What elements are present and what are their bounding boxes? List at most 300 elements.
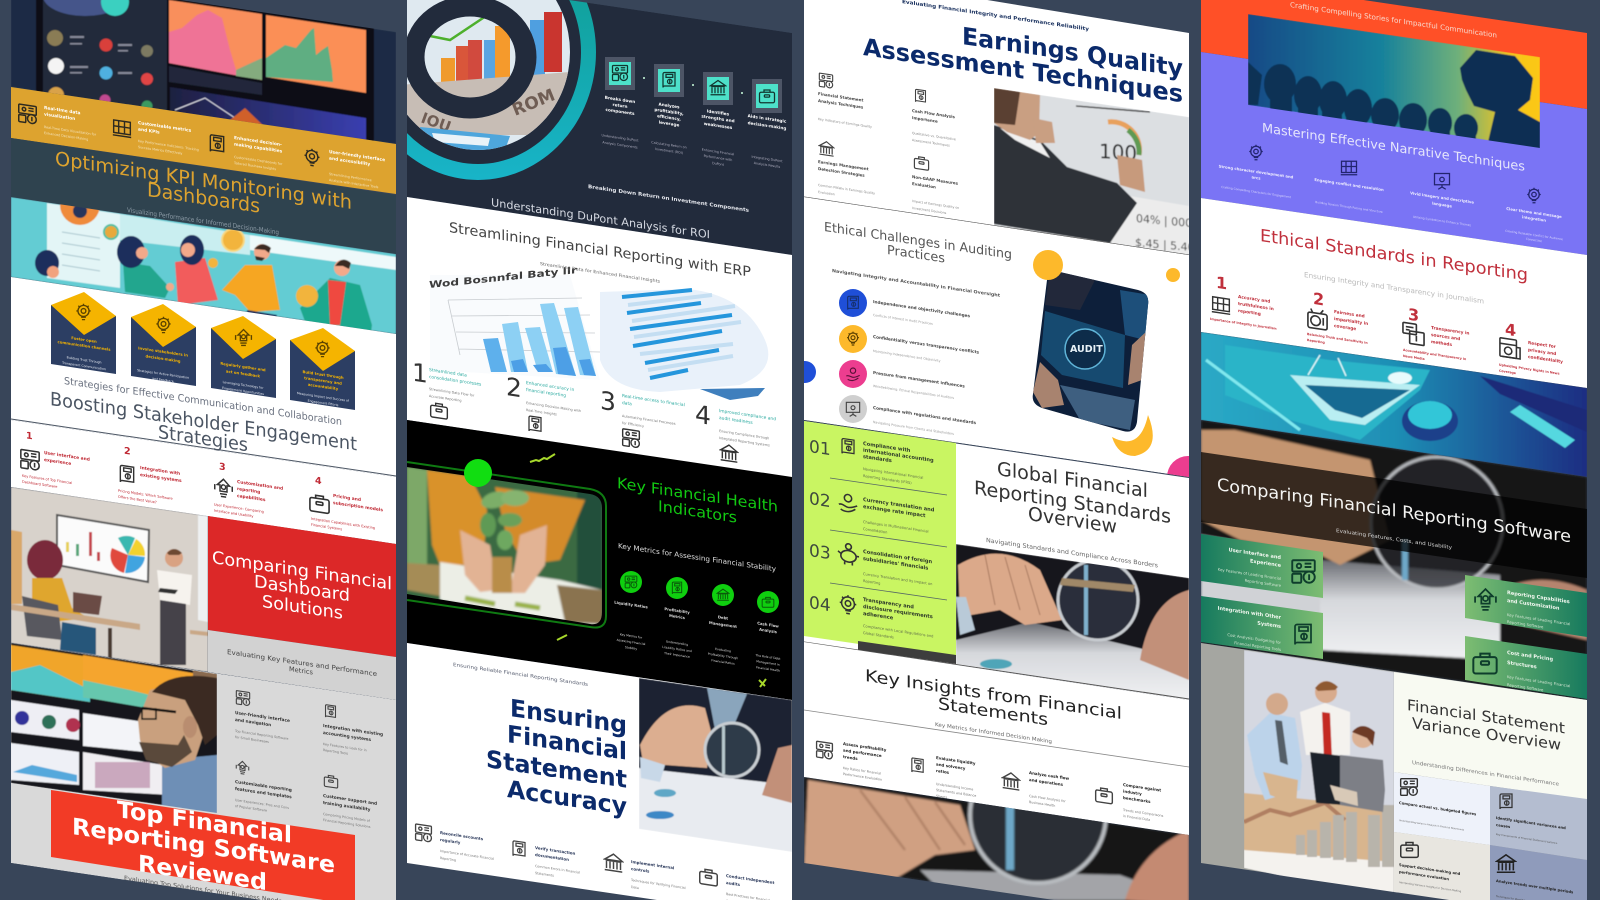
cream title panel: Understanding Differences in Financial Performance (1412, 760, 1559, 788)
photo: magnifying glass on report (639, 678, 792, 852)
panel: KPI dashboard photo (11, 0, 396, 145)
technique 2: Building Tension Through Pacing and Structure (1315, 200, 1383, 214)
standard 2: Fairness and (1334, 309, 1365, 320)
subheading: Ensuring Integrity and Transparency in Journalism (1304, 270, 1484, 306)
technique 1 (818, 73, 872, 129)
item 3: Implement internal (631, 859, 675, 870)
card: build trust: Build trust through (302, 369, 344, 380)
feature: real-time data: Real-time data (44, 105, 80, 116)
feature: real-time data: Real-Time Data Visualization for (44, 125, 97, 137)
insight 3: Business Health (1029, 800, 1055, 808)
insight 3: Cash Flow Analysis for (1029, 794, 1066, 804)
panel: key insights from financial statements (804, 642, 1189, 835)
card: user interface: User Interface and (1229, 547, 1281, 561)
standard 1: reporting (1238, 308, 1261, 317)
subheading: Navigating Integrity and Accountability in Financial Oversight (832, 268, 1000, 299)
standard 2 (1307, 288, 1368, 351)
quadrant 1 (1394, 772, 1490, 845)
standard 01: Reporting Standards (IFRS) (863, 474, 912, 485)
subheading: Strategies for Effective Communication and Collaboration (64, 376, 342, 428)
step 2: Enhanced accuracy in (526, 380, 574, 393)
item 1: Dashboard Software (22, 480, 57, 489)
illustration: team collaborating (11, 197, 396, 334)
feature: enhanced decision-making: Tailored Business Insights (233, 161, 276, 171)
technique 2: Assessment Techniques (912, 138, 950, 148)
chart photo: bars (429, 265, 600, 380)
heading: Statement (486, 745, 627, 794)
challenge 3 (839, 360, 965, 400)
heading line 2: Statements (938, 694, 1048, 729)
bottom mask: slanted page edge (1201, 864, 1600, 900)
technique 1: Financial Statement (818, 91, 863, 103)
technique 4: Impact of Earnings Quality on (912, 199, 959, 210)
step 3: Enhancing Financial (702, 148, 734, 156)
standard 4 (1499, 319, 1563, 382)
feature 2 (323, 704, 383, 755)
card: cost and pricing: Key Features of Leading Financial (1507, 674, 1570, 688)
heading: Ensuring (510, 694, 627, 739)
photo: hands with coins and seedling (405, 460, 605, 630)
feature: customizable metrics: and KPIs (138, 127, 160, 136)
panel: DuPont analysis (407, 0, 792, 255)
technique 3 (818, 140, 875, 202)
item 3 (214, 461, 283, 523)
metric 2: Liquidity Ratios and (662, 645, 692, 653)
technique 3: Vivid imagery and descriptive (1410, 190, 1474, 205)
quadrant 2 (1490, 786, 1587, 860)
feature: real-time data (19, 101, 97, 143)
feature: user-friendly interface: User-friendly interface (329, 149, 385, 163)
challenge 3: Whistleblowing: Ethical Responsibilities of Auditors (873, 384, 954, 400)
step 4: Integrated Reporting Systems (719, 436, 770, 448)
challenge 1: Independence and objectivity challenges (873, 299, 970, 318)
feature: customizable metrics: Success Metrics Effectively (138, 145, 182, 156)
quadrant 2: Key Components of Financial Statement Variance (1496, 832, 1558, 845)
feature 4 (323, 775, 377, 830)
metric 3: Profitability Through (708, 652, 738, 660)
feature: customizable metrics: Key Performance Indicators: Tracking (138, 139, 199, 152)
step 3: DuPont (712, 161, 725, 167)
standard 02: 02 (809, 489, 831, 512)
card: involve stakeholders (131, 304, 196, 386)
standard 4: privacy and (1528, 347, 1556, 357)
column 4: narrative, ethics and software (1201, 0, 1600, 900)
heading (974, 457, 1171, 538)
feature 4: Financial Reporting Solutions (323, 818, 371, 829)
step 1: Streamlining Data Flow for (429, 387, 475, 398)
item 1: 1 (26, 430, 33, 442)
technique 1: arcs (1252, 174, 1261, 181)
image frame (407, 462, 606, 628)
item 3: controls (631, 866, 650, 874)
feature 3: features and templates (235, 786, 292, 800)
card: integration: Cost Analysis: Budgeting for (1227, 632, 1281, 645)
item 2: Pricing Models: Which Software (118, 489, 173, 501)
step 2: Enhancing Decision-Making with (526, 401, 581, 413)
standard 03: Currency Translation and Its Impact on (863, 572, 932, 586)
item 4: 4 (315, 475, 322, 487)
step 1: Accurate Reporting (429, 394, 462, 403)
step 4: audit readiness (719, 415, 753, 426)
step 1: components (606, 107, 635, 116)
item 1: Key Features of Top Financial (22, 474, 72, 485)
cream title panel (1394, 672, 1587, 800)
metric 4: Cash Flow (757, 620, 779, 629)
column 3: quality, ethics and standards (794, 0, 1209, 900)
quadrant 1: Compare actual vs. budgeted figures (1399, 801, 1477, 817)
card: gather feedback: Engagement Opportunities (222, 386, 264, 396)
challenge 1: Conflicts of Interest in Audit Practices (873, 313, 933, 326)
step 4 (748, 79, 787, 169)
quadrant 3: Interpreting Variance Insights for Decision-Making (1399, 880, 1462, 893)
insight 2: Sheets (936, 794, 947, 800)
challenge 3: Pressure from management influences (873, 370, 965, 389)
standard 01: Navigating International Financial (863, 467, 923, 480)
technique 1 (1219, 145, 1294, 199)
standard 04: Global Standards (863, 631, 894, 640)
card: open communication: Foster open (71, 335, 97, 344)
insight 2: and solvency (936, 762, 966, 771)
technique 1: Strong character development and (1219, 163, 1294, 180)
metric 1 (614, 571, 648, 651)
step 3 (600, 386, 685, 455)
heading (486, 694, 627, 821)
heading line 3: Solutions (262, 592, 343, 624)
insight 1 (817, 737, 887, 782)
step 3: 3 (600, 386, 616, 417)
step 3: Real-time access to financial (622, 393, 685, 408)
standard 02: Challenges in Multinational Financial (863, 520, 929, 534)
technique 3: Common Pitfalls in Earnings Quality (818, 183, 875, 195)
step 1: Breaks down (605, 95, 635, 104)
card: integration: Systems (1257, 621, 1281, 630)
heading line 2: Dashboard (254, 572, 350, 606)
challenge 2: Confidentiality versus transparency conflicts (873, 334, 980, 355)
item 2: Common Errors in Financial (535, 864, 580, 875)
standard 3: News Media (1403, 354, 1425, 361)
card: integration: Integration with Other (1218, 606, 1282, 621)
standard 01: international accounting (863, 448, 934, 464)
panel: comparing financial reporting software (1201, 420, 1587, 700)
item 4: Conduct independent (726, 873, 774, 885)
technique 2 (912, 89, 956, 148)
quadrant 2: Identify significant variances and (1496, 816, 1566, 830)
card: cost and pricing: Reporting Software (1507, 682, 1544, 692)
step 3: weaknesses (704, 121, 733, 130)
technique 4: Creating Relatable Conflict for Audience (1505, 229, 1563, 241)
standard 1 (1210, 272, 1277, 331)
step 2 (506, 372, 581, 439)
quadrant 3: performance evaluation (1399, 870, 1449, 881)
photo: digital scales of justice (1201, 332, 1587, 477)
metric 1: Stability (625, 645, 637, 651)
card: build trust: accountability (308, 382, 339, 391)
card: reporting capabilities: Reporting Capabilities (1507, 590, 1570, 605)
technique 3: Detection Strategies (818, 166, 865, 178)
standard 3 (1403, 304, 1469, 368)
panel: financial statement variance overview (1201, 643, 1587, 900)
item 3: Interface and Usability (214, 509, 253, 518)
standard 3: 3 (1408, 305, 1419, 325)
step 1 (412, 358, 482, 424)
panel: stakeholder engagement strategies (11, 277, 396, 477)
standard 4: Respect for (1528, 340, 1557, 350)
red title box: Reviewed (138, 851, 267, 896)
card: involve stakeholders: and Feedback (152, 376, 174, 384)
heading: Understanding DuPont Analysis for ROI (491, 196, 710, 241)
heading line 2: Strategies (158, 422, 248, 456)
metric 4: The Role of Debt (755, 653, 781, 661)
card: reporting capabilities: Reporting Software (1507, 619, 1544, 629)
subheading: Navigating Standards and Compliance Across Borders (986, 537, 1158, 569)
photo: man marking gauge on whiteboard: 04% | 000 (1136, 212, 1192, 230)
feature 2: accounting systems (323, 730, 371, 743)
technique 3: language (1432, 201, 1452, 209)
heading: Earnings Quality (962, 22, 1183, 83)
item 2: documentation (535, 852, 569, 862)
card: build trust: Measuring Impact and Success of (297, 391, 350, 403)
card: open communication: Transparent Communication (61, 361, 106, 371)
heading: Optimizing KPI Monitoring with (55, 147, 352, 214)
heading: Global Financial (997, 457, 1148, 502)
item 4: Integration Capabilities with Existing (311, 517, 375, 530)
metric 3: Evaluating (715, 647, 731, 653)
technique 1: Key Indicators of Earnings Quality (818, 117, 872, 129)
standard 3: Accountability and Transparency in (1403, 348, 1467, 361)
metric 3 (708, 584, 738, 666)
feature 1: User-friendly interface (235, 710, 290, 724)
photo: man marking gauge on whiteboard: $.45 | 5.40 (1135, 236, 1195, 254)
technique 3: Earnings Management (818, 159, 869, 171)
step 4: decision-making (748, 120, 786, 131)
item 2: 2 (124, 446, 131, 458)
card: user interface: Experience (1250, 558, 1282, 569)
feature: user-friendly interface: Analysis with Interactive Tools (329, 178, 379, 189)
panel: ERP reporting (407, 197, 792, 478)
standard 03: subsidiaries' financials (863, 556, 928, 572)
metric 4 (755, 591, 781, 673)
photo: close-up of magnifier (804, 747, 1189, 900)
subheading: Evaluating Features, Costs, and Usability (1336, 528, 1452, 551)
metric 2: Understanding (666, 639, 688, 647)
heading: Comparing Financial Reporting Software (1217, 475, 1571, 547)
card: build trust: transparency and (304, 375, 342, 386)
step 3: data (622, 400, 632, 407)
panel: ethical standards in reporting (1201, 198, 1587, 388)
item 1: Reconcile accounts (440, 830, 484, 841)
feature: customizable metrics (113, 116, 199, 158)
card: involve stakeholders: decision-making (145, 353, 181, 364)
metric 2: Profitability (664, 606, 690, 615)
standard 1: truthfulness in (1238, 301, 1274, 312)
teal ring and chart photo (407, 0, 596, 180)
panel: comparing subtitle: Metrics (289, 665, 313, 677)
standard 03: Reporting (863, 579, 880, 586)
chart photo: horizontal bars (600, 289, 768, 400)
card: build trust: Engagement Efforts (308, 399, 339, 407)
technique 4 (1505, 188, 1563, 243)
feature 1: for Small Businesses (235, 735, 269, 744)
item 1: experience (44, 457, 71, 467)
feature: user-friendly interface (304, 145, 385, 190)
standard 02 (809, 489, 935, 542)
feature: enhanced decision-making: making capabilities (234, 142, 283, 155)
panel: real-time dashboard features band (11, 87, 396, 194)
challenge 2: Maintaining Independence and Objectivity (873, 349, 941, 363)
card: reporting capabilities: Key Features of Leading Financial (1507, 612, 1570, 626)
metric 2: Metrics (669, 613, 686, 620)
card: build trust (290, 328, 355, 410)
step 3 (701, 72, 735, 167)
photo: office dashboard meeting (11, 487, 208, 672)
standard 03: 03 (809, 541, 831, 564)
item 3: User Experience: Comparing (214, 503, 264, 514)
card: cost and pricing (1465, 636, 1587, 699)
insight 2: Understanding Income (936, 782, 973, 792)
photo: man marking gauge on whiteboard: 100 (1099, 139, 1137, 165)
technique 4: Non-GAAP Measures (912, 174, 959, 186)
feature 3: Customizable reporting (235, 779, 292, 793)
standard 1: Accuracy and (1238, 294, 1270, 305)
item 4: Pricing and (333, 493, 361, 503)
step 1: Analysis Components (602, 140, 638, 150)
step 2: Calculating Return on (651, 140, 687, 150)
insight 1: Assess profitability (843, 741, 887, 752)
item 2: Statements (535, 871, 554, 878)
standard 2: coverage (1334, 323, 1356, 332)
step 4: Analysis Results (754, 161, 780, 169)
card: integration (1201, 596, 1323, 659)
insight 1: Performance Evaluation (843, 772, 882, 782)
step 4: Improved compliance and (719, 408, 776, 422)
step 2: Real-Time Insights (526, 408, 557, 417)
card: open communication: communication channels (57, 339, 111, 352)
panel: narrative title orange band (1201, 0, 1587, 109)
metric 3: Management (709, 620, 737, 629)
feature: user-friendly interface: Streamlining Performance (329, 172, 372, 182)
standard 2: 2 (1313, 289, 1324, 310)
technique 4: Clear theme and message (1506, 206, 1562, 219)
technique 3: Utilizing Symbolism to Enhance Themes (1413, 215, 1472, 227)
step 1: Understanding DuPont (601, 133, 639, 143)
insight 4: Trends and Comparisons (1122, 808, 1164, 818)
panel: KPI monitoring title (11, 138, 396, 254)
card: open communication (51, 292, 116, 374)
step 2: Analyzes (658, 101, 680, 110)
feature 1: Top Financial Reporting Software (234, 729, 288, 741)
standard 02: Consolidation (863, 527, 887, 535)
standard 04 (809, 589, 933, 645)
item 1: User interface and (44, 450, 90, 463)
insight 1: and performance (843, 748, 882, 758)
technique 4: Evaluation (912, 181, 936, 190)
standard 04: Compliance with Local Regulations and (863, 624, 933, 638)
heading: Ethical Standards in Reporting (1260, 226, 1528, 286)
item 3: capabilities (237, 493, 266, 503)
technique 3 (1410, 174, 1474, 227)
item 3: Data (631, 885, 639, 890)
metric 2 (662, 577, 692, 659)
step 3: strengths and (701, 114, 735, 123)
feature 1: and navigation (235, 717, 271, 728)
decor (464, 454, 766, 687)
red title box: Top Financial (117, 797, 292, 849)
quadrant 3 (1394, 832, 1490, 900)
standard 02: Currency translation and (863, 497, 935, 514)
feature: enhanced decision-making: Customizable Dashboards for (234, 155, 283, 166)
card: gather feedback (211, 316, 276, 398)
feature: enhanced decision-making (210, 132, 283, 172)
challenge 4: Compliance with regulations and standards (873, 405, 977, 425)
technique 2: Engaging conflict and resolution (1314, 177, 1384, 192)
quadrant 4: Analyze trends over multiple periods (1496, 879, 1574, 895)
card: gather feedback: act on feedback (226, 368, 261, 379)
insight 3: Analyze cash flow (1029, 770, 1069, 781)
subheading: Key Metrics for Informed Decision Making (935, 722, 1052, 745)
step 4: Integrating DuPont (751, 155, 783, 163)
standard 3: Transparency in (1431, 325, 1469, 337)
standard 4: Coverage (1499, 369, 1517, 375)
panel: top financial reporting software (11, 643, 396, 900)
step 3: Automating Financial Processes (622, 414, 676, 426)
technique 2 (1314, 161, 1384, 214)
step 4: Ensuring Compliance through (719, 429, 769, 440)
heading: Reporting Standards (974, 476, 1171, 528)
standard 01: 01 (809, 437, 831, 460)
standard 01: Compliance with (863, 441, 911, 454)
feature 4: Customer support and (323, 793, 377, 807)
standard 2: impartiality in (1334, 316, 1368, 327)
feature 4: Comparing Pricing Models of (323, 812, 371, 823)
insight 4: industry (1123, 789, 1142, 796)
step 2 (651, 64, 687, 155)
heading line 2: Practices (887, 243, 945, 267)
photo: analyst viewing monitors (11, 643, 217, 815)
technique 4 (912, 156, 959, 217)
column 1: financial dashboards (11, 0, 396, 900)
photo: silhouettes and speaker (1248, 14, 1540, 152)
feature: user-friendly interface: and accessibility (329, 156, 370, 168)
metric 1: Key Metrics for (620, 632, 643, 640)
lime panel: standards list (804, 421, 956, 664)
insight 4 (1096, 778, 1164, 824)
challenge 1 (839, 289, 970, 326)
feature 4: training availability (323, 800, 371, 813)
standard 4: 4 (1505, 320, 1516, 340)
feature: real-time data: Enhanced Decision-Making (44, 131, 88, 142)
insight 3: and operations (1029, 777, 1064, 787)
insight 1: Key Ratios for Financial (843, 766, 881, 776)
standard 2: Reporting (1307, 338, 1326, 345)
step 3: Identifies (707, 108, 730, 117)
panel: comparing subtitle: Evaluating Key Features and Performance (227, 648, 377, 678)
technique 4: integration (1522, 214, 1546, 223)
item 2: existing systems (140, 472, 182, 484)
step 4: Aids in strategic (748, 113, 787, 124)
item 4: Financial Systems (311, 523, 342, 531)
insight 4: Compare against (1123, 782, 1161, 793)
decor: accent shapes (804, 250, 1189, 477)
subheading: Streamlining Data for Enhanced Financial Insights (540, 261, 661, 285)
dark title band (1201, 452, 1587, 578)
insight 3 (1003, 766, 1069, 810)
item 2: Integration with (140, 465, 180, 477)
heading line 2: Indicators (658, 497, 737, 527)
feature 2: Integration with existing (323, 723, 383, 738)
standard 01: standards (863, 454, 892, 464)
step 3: Performance with (704, 154, 732, 162)
insight 2: ratios (936, 768, 950, 775)
